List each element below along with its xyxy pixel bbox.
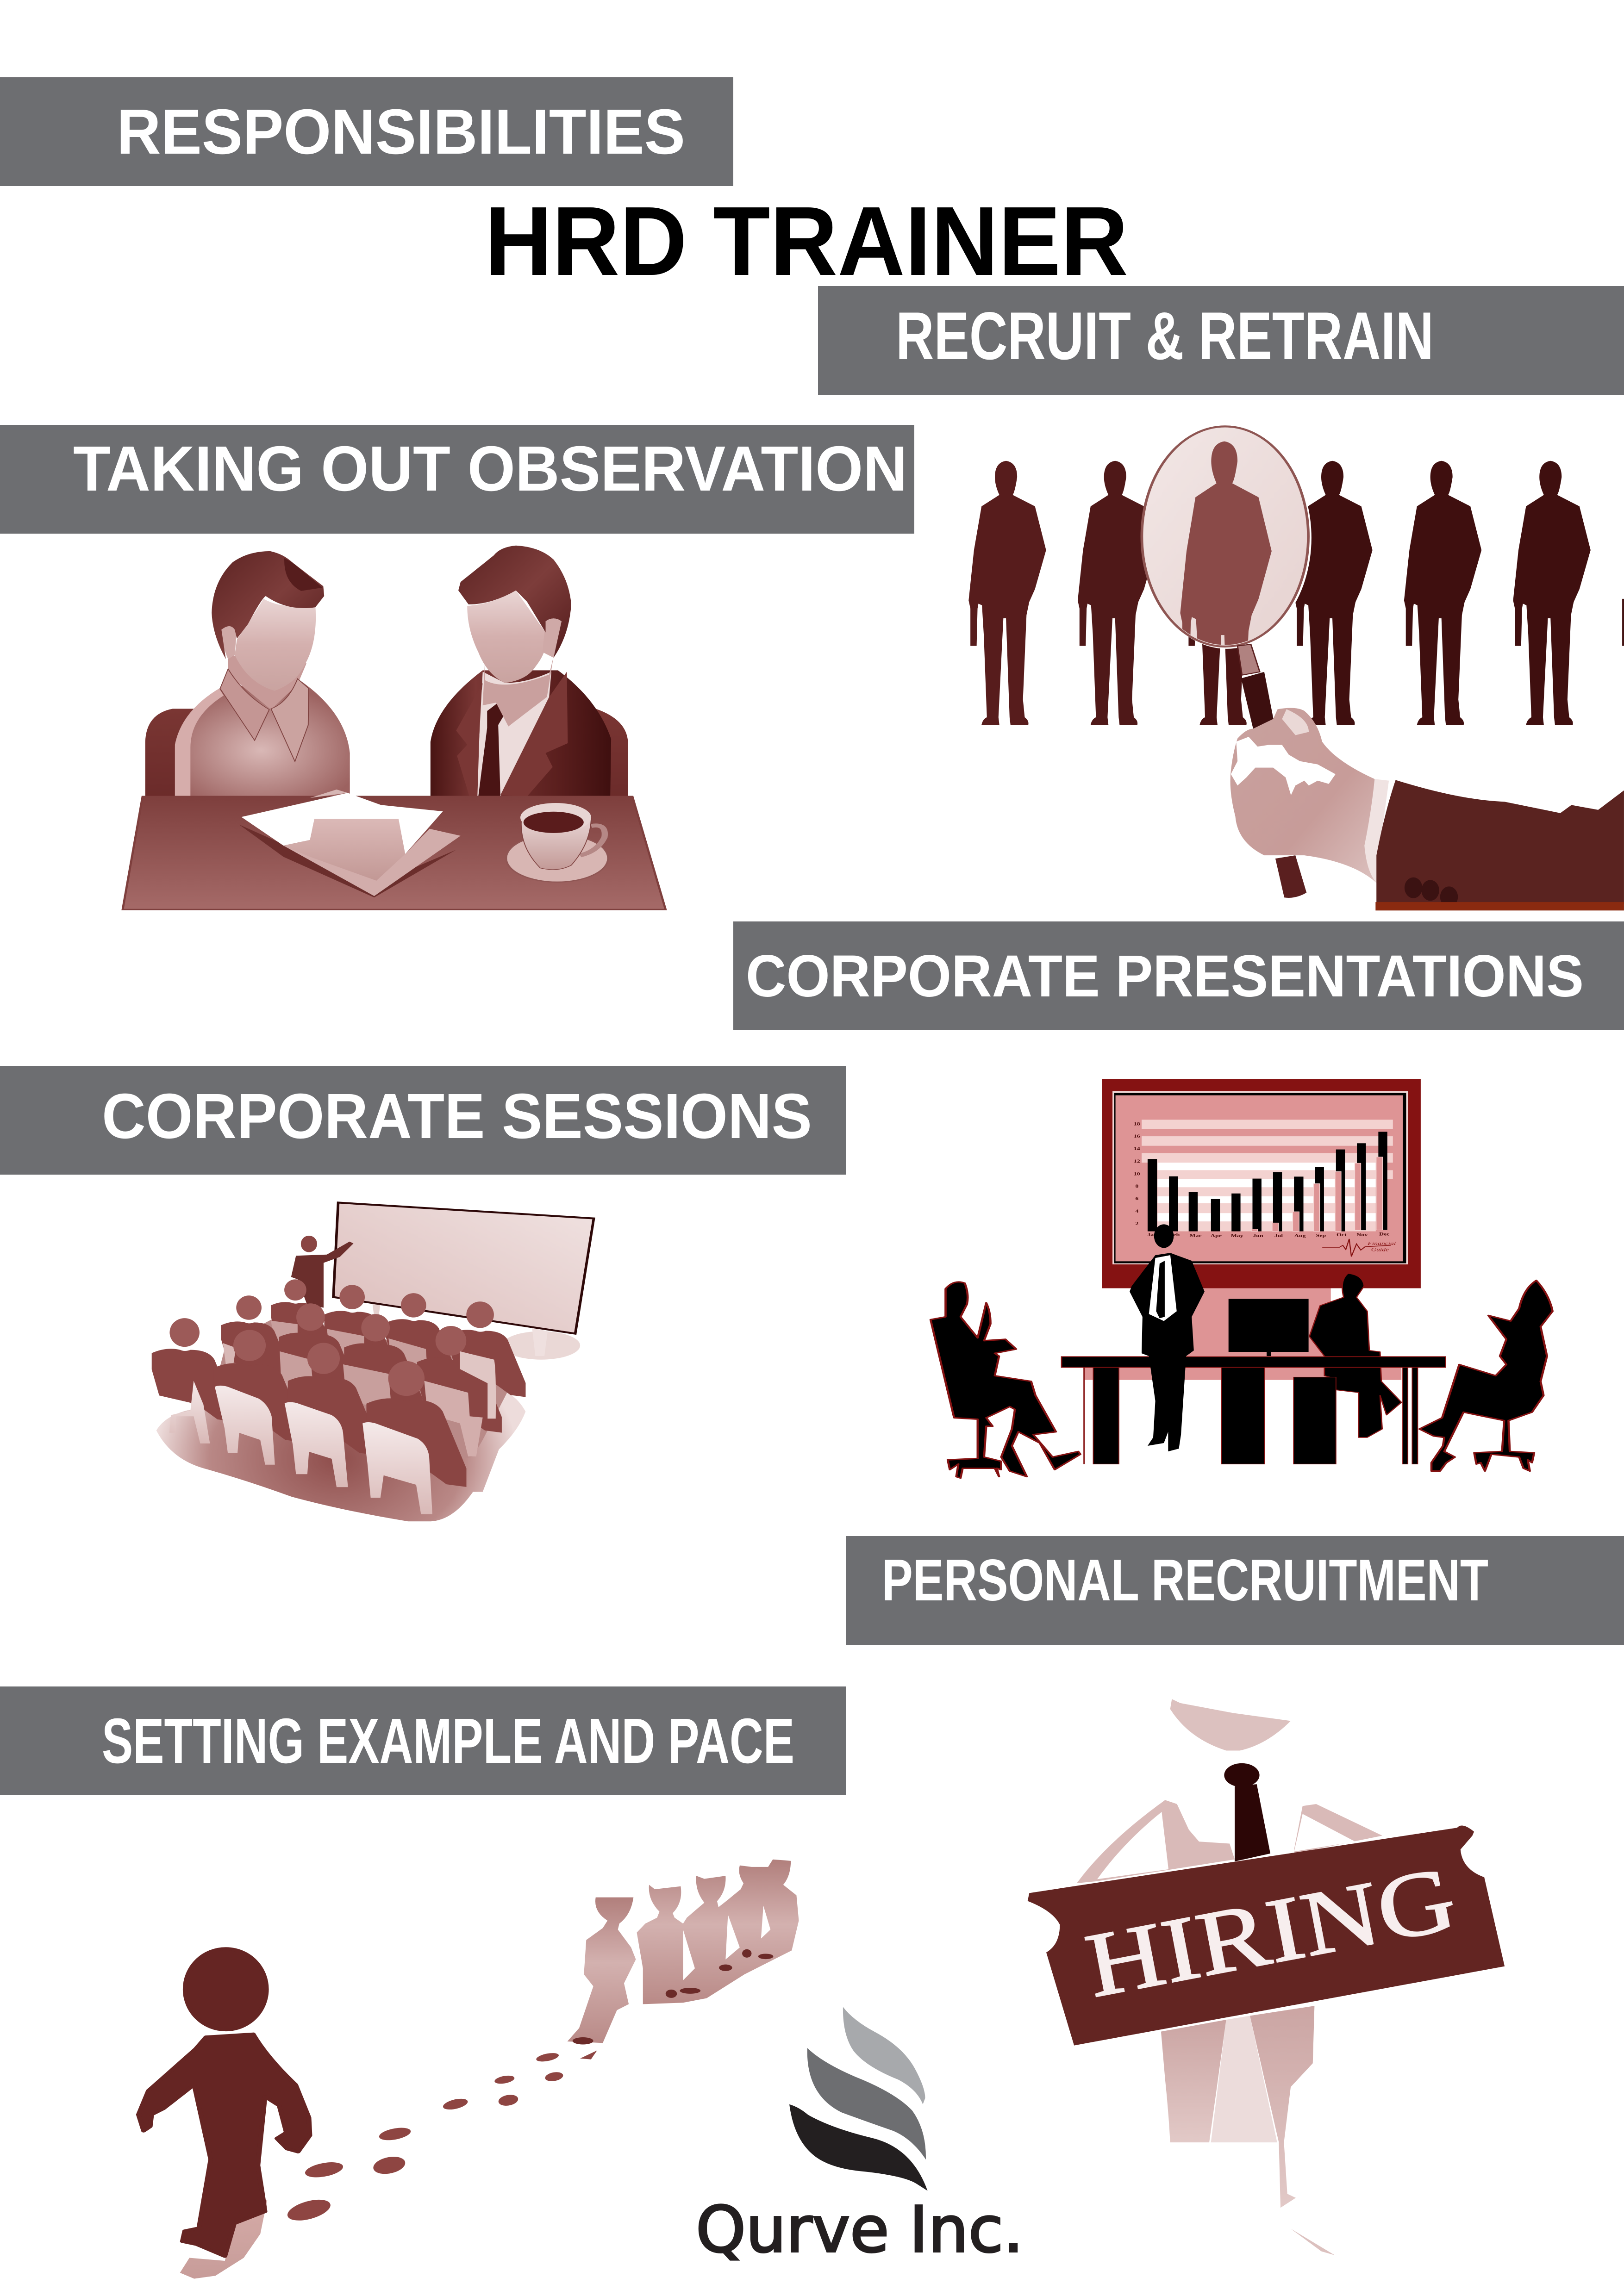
bar chart xyxy=(1134,1120,1393,1238)
title: HRD trainer: HRD TRAINER xyxy=(485,186,1128,296)
audience backdrop xyxy=(215,1319,512,1463)
bar chart: 16 xyxy=(1134,1134,1140,1139)
heading: personal recruitment xyxy=(846,1536,1624,1645)
heading: taking out observation xyxy=(0,425,914,534)
bar chart: 6 xyxy=(1135,1197,1138,1201)
magnifier handle xyxy=(1237,644,1306,898)
bar chart: Dec xyxy=(1379,1232,1389,1237)
chin xyxy=(1170,1699,1291,1750)
bar chart: Feb xyxy=(1169,1232,1180,1237)
conference table xyxy=(1062,1356,1446,1464)
heading: corporate sessions xyxy=(0,1066,846,1175)
bar chart: Jul xyxy=(1274,1233,1283,1238)
bar chart: 8 xyxy=(1135,1184,1138,1188)
bar chart: Apr xyxy=(1211,1233,1222,1238)
illustration: classroom session xyxy=(152,1202,594,1521)
financial guide mark: Financial xyxy=(1367,1241,1396,1246)
floor shadow xyxy=(156,1332,580,1521)
bar chart: Jan xyxy=(1147,1232,1157,1237)
illustration: two men at a desk xyxy=(123,546,666,909)
necktie xyxy=(1224,1763,1270,1861)
bar chart: 12 xyxy=(1134,1159,1140,1164)
logo: Qurve Inc. xyxy=(696,2007,1024,2267)
footprints xyxy=(282,2050,597,2225)
sign text: HIRING xyxy=(1078,1847,1463,2016)
seated woman at table xyxy=(1309,1273,1401,1437)
heading: recruit and retrain xyxy=(818,286,1624,395)
logo mark: three leaves xyxy=(789,2007,928,2191)
financial guide mark xyxy=(1322,1239,1396,1257)
heading: setting example and pace: SETTING EXAMPLE AND PACE xyxy=(102,1705,794,1777)
desk xyxy=(123,796,666,909)
bar chart: Aug xyxy=(1294,1233,1306,1238)
followers xyxy=(568,1860,799,2044)
wall panels xyxy=(1085,1288,1401,1380)
financial guide mark: Guide xyxy=(1371,1247,1389,1252)
hand xyxy=(1230,708,1376,883)
front chairs xyxy=(169,1381,432,1514)
heading: responsibilities: RESPONSIBILITIES xyxy=(117,96,685,168)
suit sleeve xyxy=(1364,779,1624,910)
logo wordmark: Qurve Inc. xyxy=(696,2193,1024,2267)
bar chart: May xyxy=(1231,1233,1243,1238)
illustration: leader walking with followers xyxy=(138,1860,799,2279)
presenter xyxy=(291,1236,353,1308)
heading: recruit and retrain: RECRUIT & RETRAIN xyxy=(896,298,1434,373)
bar chart: Mar xyxy=(1189,1233,1202,1238)
candidate silhouettes xyxy=(968,461,1624,725)
rear chairs xyxy=(271,1321,427,1371)
bar chart: 10 xyxy=(1134,1172,1140,1176)
coffee cup xyxy=(506,803,608,882)
illustration: magnifying glass over candidates xyxy=(968,426,1624,910)
bar chart: Sep xyxy=(1316,1233,1326,1238)
chair backs xyxy=(145,709,628,798)
heading: corporate sessions: CORPORATE SESSIONS xyxy=(102,1081,812,1152)
shirt collar xyxy=(1077,1800,1382,1883)
heading: responsibilities xyxy=(0,77,733,186)
heading: setting example and pace xyxy=(0,1686,846,1795)
lower body xyxy=(1161,2006,1335,2255)
left man xyxy=(175,551,350,796)
magnifying lens xyxy=(1141,425,1312,649)
bar chart: 2 xyxy=(1135,1221,1138,1226)
monitor xyxy=(1229,1299,1309,1356)
leader shadow xyxy=(180,2200,268,2279)
standing presenter xyxy=(1130,1224,1205,1451)
bar chart: Jun xyxy=(1253,1233,1263,1238)
papers xyxy=(239,790,461,897)
middle chairs xyxy=(223,1343,496,1456)
presentation screen xyxy=(1102,1079,1421,1288)
illustration: hiring sign xyxy=(1028,1699,1505,2255)
sign board xyxy=(1028,1825,1505,2046)
rear audience row xyxy=(271,1279,525,1397)
front audience row xyxy=(152,1318,466,1487)
middle audience row xyxy=(221,1295,502,1433)
seated woman right xyxy=(1419,1281,1553,1471)
heading: corporate presentations xyxy=(733,921,1624,1030)
bar chart: Nov xyxy=(1356,1232,1368,1237)
bar chart: Oct xyxy=(1337,1232,1347,1237)
whiteboard xyxy=(333,1202,594,1356)
seated man left xyxy=(931,1282,1081,1478)
leader figure xyxy=(138,1948,310,2256)
bar chart: 14 xyxy=(1134,1146,1140,1151)
right man xyxy=(431,546,611,796)
bar chart: 18 xyxy=(1134,1122,1140,1126)
bar chart: 4 xyxy=(1135,1209,1138,1213)
heading: taking out observation: TAKING OUT OBSERVATION xyxy=(73,433,907,504)
illustration: boardroom presentation xyxy=(931,1079,1553,1478)
heading: corporate presentations: CORPORATE PRESENTATIONS xyxy=(746,943,1584,1009)
